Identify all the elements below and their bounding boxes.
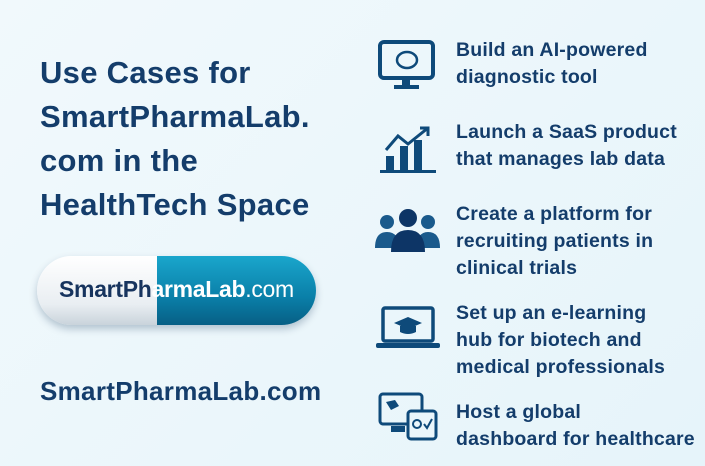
item 5: Host a global (456, 401, 581, 423)
title (40, 55, 310, 222)
icon: growth chart (380, 126, 436, 173)
item 3: Create a platform for (456, 203, 652, 225)
item 5 (456, 401, 695, 450)
item 2: Launch a SaaS product (456, 121, 677, 143)
item 4 (456, 302, 665, 378)
item 3: recruiting patients in (456, 230, 653, 252)
item 3 (456, 203, 653, 279)
title: Use Cases for (40, 55, 251, 90)
item 4: hub for biotech and (456, 329, 642, 351)
item 4: medical professionals (456, 356, 665, 378)
item 2 (456, 121, 677, 170)
title: HealthTech Space (40, 187, 310, 222)
item 3: clinical trials (456, 257, 577, 279)
pill logo (37, 256, 316, 325)
item 2: that manages lab data (456, 148, 665, 170)
item 1: Build an AI-powered (456, 39, 648, 61)
title: com in the (40, 143, 198, 178)
title: SmartPharmaLab. (40, 99, 310, 134)
icon: people (375, 209, 440, 252)
item 5: dashboard for healthcare (456, 428, 695, 450)
icon: dashboard (378, 392, 438, 440)
pill logo: SmartPharmaLab.com (59, 276, 294, 302)
icon: monitor brain (378, 40, 435, 89)
icon: laptop grad cap (376, 306, 440, 348)
item 4: Set up an e-learning (456, 302, 646, 324)
item 1: diagnostic tool (456, 66, 598, 88)
item 1 (456, 39, 648, 88)
domain text: SmartPharmaLab.com (40, 376, 321, 406)
